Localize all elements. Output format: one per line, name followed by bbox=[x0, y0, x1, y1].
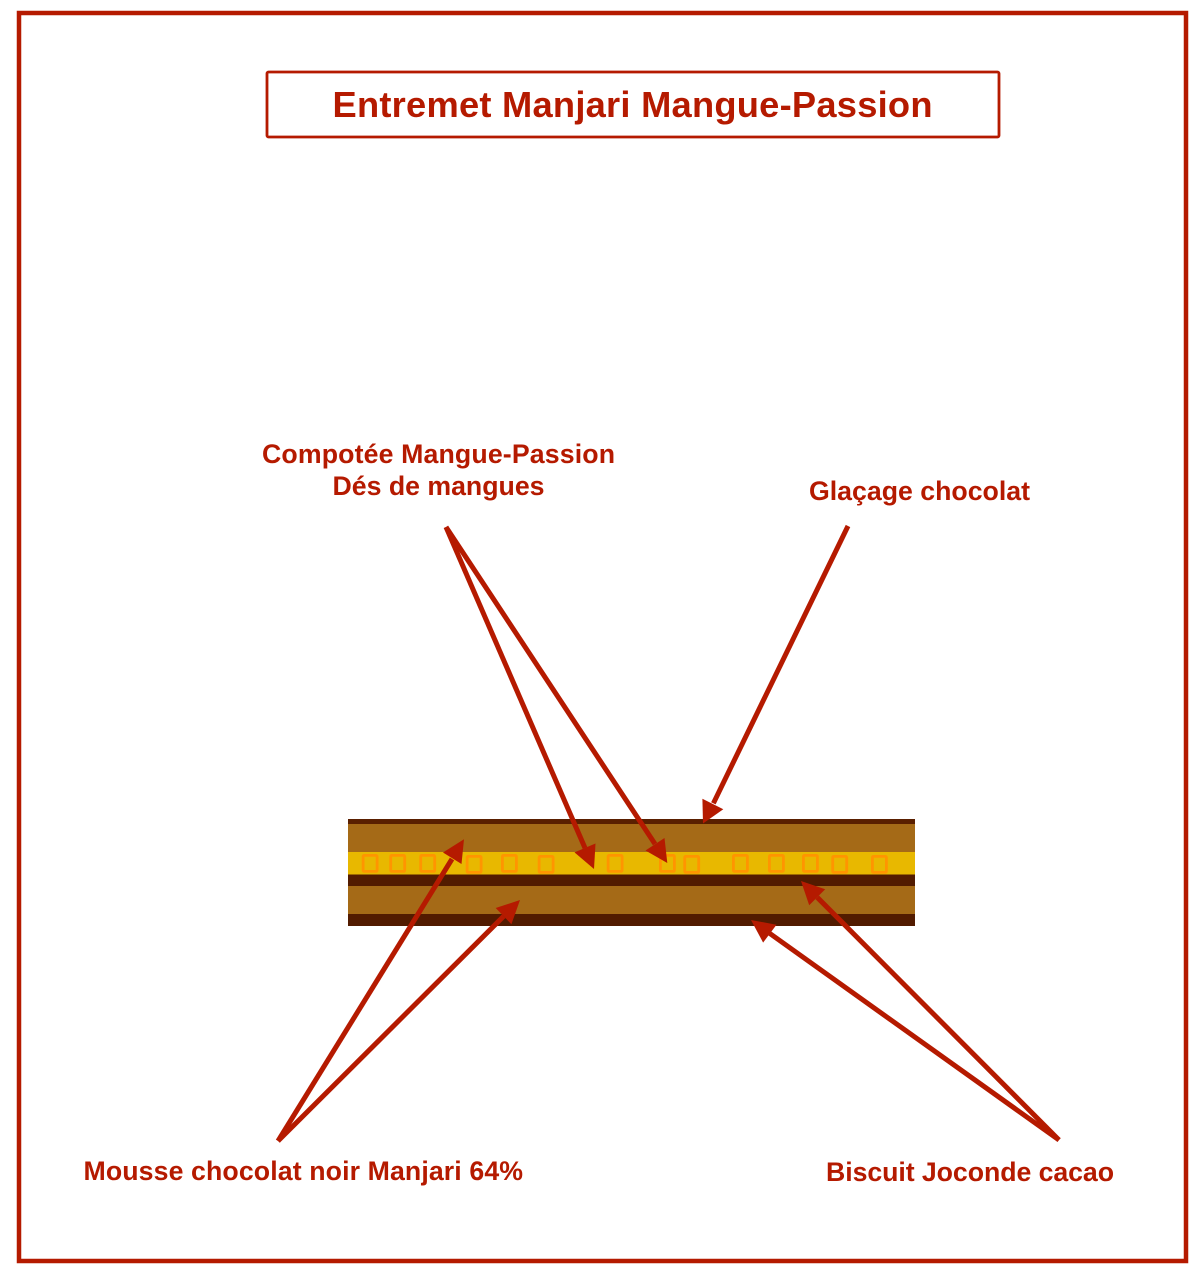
label: mousse chocolat noir: Mousse chocolat noir Manjari 64% bbox=[84, 1156, 523, 1186]
label: biscuit joconde: Biscuit Joconde cacao bbox=[826, 1157, 1114, 1187]
label: compotée mangue-passion, dés de mangues: Compotée Mangue-Passion bbox=[262, 439, 615, 469]
label: compotée mangue-passion, dés de mangues: Dés de mangues bbox=[332, 471, 544, 501]
mango cubes bbox=[363, 855, 886, 872]
layer: upper Manjari mousse bbox=[348, 824, 915, 852]
arrows: compotée to compote layer bbox=[446, 527, 667, 869]
arrows: mousse to mousse layers bbox=[278, 839, 520, 1141]
layer: mango-passion compote bbox=[348, 852, 915, 874]
cake cross-section bbox=[348, 819, 915, 926]
title box bbox=[267, 72, 999, 137]
label: glaçage chocolat: Glaçage chocolat bbox=[809, 476, 1030, 506]
title: Entremet Manjari Mangue-Passion bbox=[332, 84, 932, 125]
arrows: biscuit to biscuit layers bbox=[751, 881, 1059, 1140]
layer: chocolate glaze bbox=[348, 819, 915, 824]
arrow: glaçage to top layer bbox=[702, 526, 848, 824]
label: compotée mangue-passion, dés de mangues bbox=[262, 439, 615, 501]
layer: lower Joconde biscuit bbox=[348, 914, 915, 926]
layer: lower Manjari mousse bbox=[348, 886, 915, 914]
layer: upper Joconde biscuit bbox=[348, 874, 915, 886]
